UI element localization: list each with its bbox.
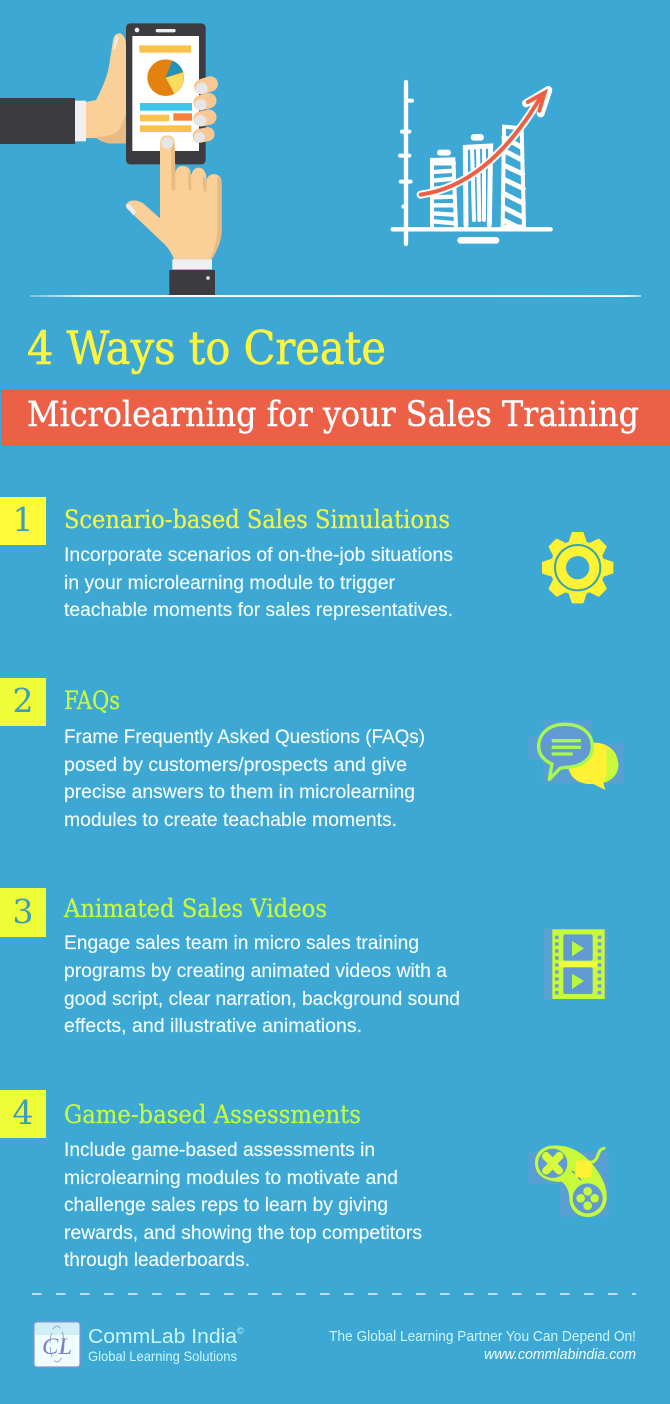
body 4: microlearning modules to motivate and bbox=[64, 1168, 398, 1189]
footer brand name bbox=[88, 1325, 244, 1364]
footer brand name: © bbox=[237, 1326, 244, 1336]
left cuff bbox=[75, 101, 86, 141]
body 1: teachable moments for sales representatives. bbox=[64, 600, 453, 621]
body 4: rewards, and showing the top competitors bbox=[64, 1223, 422, 1244]
illustration: hands holding a phone bbox=[0, 23, 222, 295]
red arrow bbox=[421, 90, 548, 195]
body 4: through leaderboards. bbox=[64, 1250, 250, 1271]
body 4 bbox=[64, 1140, 422, 1271]
step 3 bbox=[0, 888, 607, 1037]
right sleeve bbox=[169, 270, 215, 295]
illustration: rising bar chart with arrow bbox=[393, 82, 551, 244]
number badge 1 bbox=[0, 497, 46, 545]
number badge 1: 1 bbox=[12, 500, 34, 539]
number badge 3 bbox=[0, 888, 46, 937]
icon: game controller bbox=[528, 1146, 608, 1217]
body 3: effects, and illustrative animations. bbox=[64, 1016, 362, 1037]
bar two bbox=[465, 137, 491, 225]
footer tagline: The Global Learning Partner You Can Depend On! bbox=[329, 1328, 636, 1345]
right cuff bbox=[172, 259, 212, 269]
heading 1: Scenario-based Sales Simulations bbox=[64, 505, 450, 534]
body 3: Engage sales team in micro sales training bbox=[64, 933, 419, 954]
left sleeve bbox=[0, 98, 75, 144]
number badge 2: 2 bbox=[12, 681, 34, 720]
footer brand name: Global Learning Solutions bbox=[88, 1348, 237, 1364]
body 4: Include game-based assessments in bbox=[64, 1140, 375, 1161]
footer tagline: www.commlabindia.com bbox=[484, 1346, 636, 1363]
footer logo bbox=[34, 1322, 80, 1367]
body 4: challenge sales reps to learn by giving bbox=[64, 1195, 388, 1216]
number badge 2 bbox=[0, 678, 46, 726]
body 1 bbox=[64, 545, 453, 621]
footer logo: CL bbox=[42, 1334, 72, 1359]
sleeve button bbox=[206, 276, 210, 280]
left thumb shadow and nail bbox=[97, 36, 126, 143]
body 3: programs by creating animated videos with a bbox=[64, 961, 447, 982]
chart axes bbox=[393, 82, 551, 244]
body 2: posed by customers/prospects and give bbox=[64, 755, 407, 776]
step 1 bbox=[0, 497, 612, 621]
pointing hand bbox=[125, 135, 222, 259]
body 1: Incorporate scenarios of on-the-job situations bbox=[64, 545, 453, 566]
number badge 4: 4 bbox=[12, 1093, 34, 1132]
body 3 bbox=[64, 933, 460, 1037]
icon: gear bbox=[543, 533, 612, 602]
body 3: good script, clear narration, background sound bbox=[64, 989, 460, 1010]
icon: speech bubbles bbox=[528, 721, 623, 790]
footer brand name: CommLab India bbox=[88, 1325, 238, 1348]
phone bbox=[126, 23, 206, 164]
bar three bbox=[503, 127, 524, 227]
number badge 4 bbox=[0, 1090, 46, 1138]
icon: film strip bbox=[544, 929, 607, 1000]
footer tagline bbox=[329, 1328, 636, 1363]
step 4 bbox=[0, 1090, 608, 1271]
subtitle banner bbox=[1, 389, 670, 446]
heading 3: Animated Sales Videos bbox=[63, 894, 327, 923]
body 2: Frame Frequently Asked Questions (FAQs) bbox=[64, 727, 425, 748]
body 1: in your microlearning module to trigger bbox=[64, 573, 396, 594]
dashed divider bbox=[32, 1293, 636, 1295]
body 2: modules to create teachable moments. bbox=[64, 810, 397, 831]
fingers gripping the phone bbox=[191, 74, 220, 144]
bar one bbox=[432, 153, 456, 227]
body 2: precise answers to them in microlearning bbox=[64, 782, 415, 803]
left hand bbox=[86, 33, 126, 143]
step 2 bbox=[0, 678, 623, 831]
divider rule bbox=[30, 295, 641, 297]
title: 4 Ways to Create bbox=[27, 321, 386, 375]
body 2 bbox=[64, 727, 425, 831]
heading 4: Game-based Assessments bbox=[64, 1100, 361, 1129]
number badge 3: 3 bbox=[12, 892, 34, 931]
heading 2: FAQs bbox=[64, 686, 120, 715]
